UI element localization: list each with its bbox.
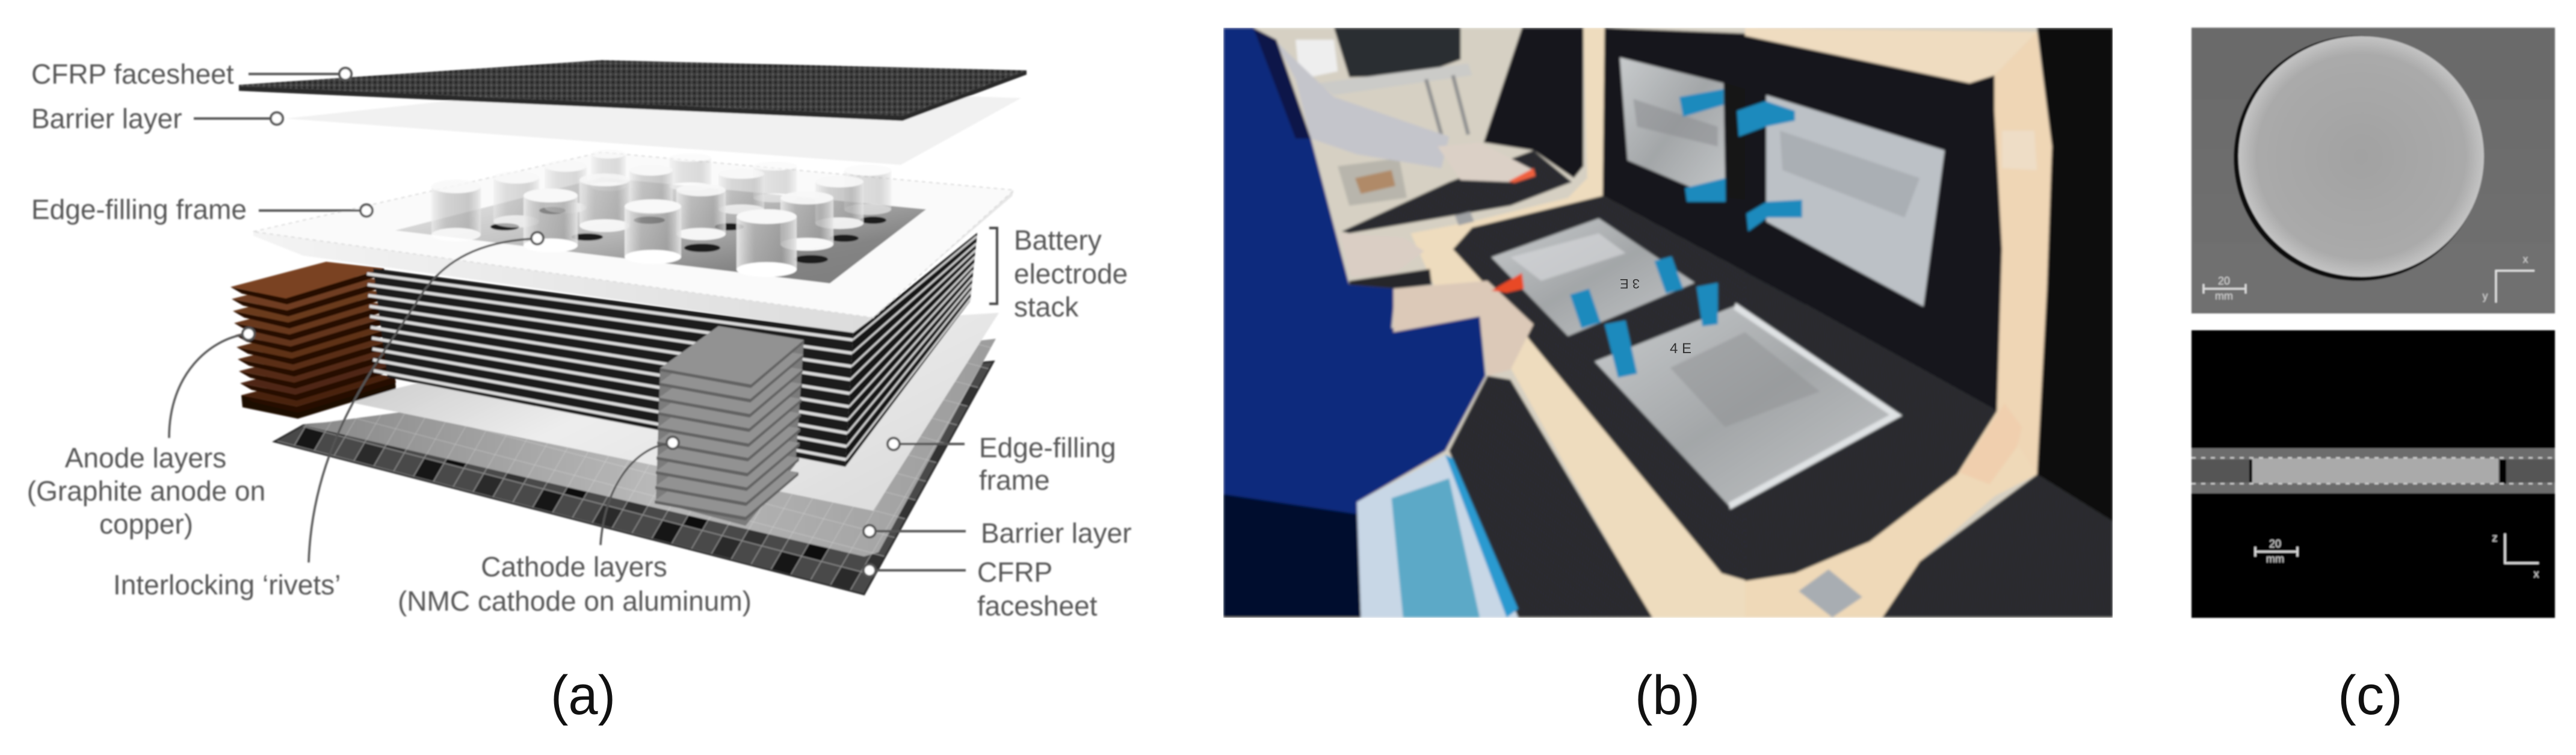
label: Anode layers: Anode layers [65,442,226,473]
panel: (a) exploded battery structure diagram [27,58,1132,621]
label: CFRP facesheet (top) [31,58,351,90]
top CFRP facesheet [239,60,1027,121]
carbon fibre pad [1451,194,1747,581]
pouch cell 1 [1491,218,1694,336]
bottom right carbon sheet [1882,475,2113,618]
panel: (c) bottom CT scan, x-z plane [2191,330,2555,618]
photo background [1223,28,2113,618]
pouch marking 4E: 4 E [1670,341,1691,357]
label: Barrier layer (bottom) [863,517,1132,549]
axes x y: x [2522,253,2528,265]
label: Edge-filling frame (bottom): Edge-filling [979,432,1116,463]
label: Anode layers: (Graphite anode on [27,475,265,507]
photo: right-side scene [1595,28,2113,618]
diagonal foam strip [1745,411,2037,618]
foam block lower [1960,403,2022,484]
gap left [2249,460,2252,482]
wall pouch cell right [1766,95,1945,306]
pillar between wall pouches [1734,119,1735,120]
black mould corner [1484,28,1583,178]
lab equipment in the background [1296,28,1472,206]
rivet holes on the frame floor [490,207,886,263]
caption: (c): (c) [2338,665,2403,726]
carbon fibre rear floor [1342,150,1572,233]
lower CFRP facesheet [274,362,993,594]
worker's glove on table [1418,248,1423,253]
label: Battery electrode stack: Battery [1014,224,1102,256]
label: Edge-filling frame (top): Edge-filling frame [31,194,247,225]
dark halo behind disc [2234,35,2483,281]
blue and white cloth [1357,455,1518,618]
colleague's white sleeve and hand [1274,40,1536,183]
label: Edge-filling frame (bottom) [888,432,1116,496]
label: CFRP facesheet (bottom): CFRP [977,556,1052,588]
dark wall [1745,32,2002,411]
lower edge-filling frame [345,313,999,511]
scale bar 20 mm: 20 [2218,275,2230,287]
axes x z [2492,532,2539,580]
label: Battery electrode stack [989,224,1128,322]
anode layers stack [230,262,396,419]
CT background [2191,28,2555,313]
top foam beam [1745,28,2037,83]
label: Battery electrode stack: stack [1014,291,1079,322]
photo: left-side scene [1223,28,1805,618]
label: CFRP facesheet (bottom) [863,556,1098,621]
foam frame [1411,28,1746,618]
label: Edge-filling frame (bottom): frame [979,464,1050,496]
axes x z: x [2533,568,2539,580]
battery electrode stack [367,233,977,467]
rear wall [1601,28,1748,274]
pouch cell 2 [1595,306,1896,506]
pouch 2 tape tabs [1605,283,1718,378]
label: CFRP facesheet (bottom): facesheet [977,590,1098,621]
foam left [2191,460,2250,482]
vertical foam strip [1962,32,2052,486]
label: Cathode layers: Cathode layers [481,551,667,582]
small metal tile [1799,569,1862,618]
interlocking rivets [431,149,891,277]
label: Cathode layers: (NMC cathode on aluminum) [398,585,752,617]
scale bar 20 mm: 20 [2269,538,2281,550]
worker's navy sweater [1223,28,1486,618]
label: Edge-filling frame (top) [31,194,372,225]
cathode layers stack [655,326,804,526]
worker's gloved hands [1394,281,1534,375]
scale bar 20 mm [2204,275,2246,302]
scale bar 20 mm: mm [2215,290,2233,302]
foam block upper [2002,131,2037,170]
wall tape tabs [1737,101,1802,232]
composite band [2191,448,2555,493]
upper edge-filling frame [253,152,1014,333]
gap right [2500,460,2506,484]
carbon fibre pad right [1745,272,1997,581]
axes x y [2483,253,2534,303]
dark table edge [1349,269,1432,289]
label: Anode layers [27,328,265,540]
wall pouch cell [1620,58,1725,202]
scale bar 20 mm [2255,538,2297,565]
label: Barrier layer (top) [31,103,283,134]
label: Interlocking rivets: Interlocking ‘rivets’ [113,569,341,600]
lower carbon fibre sheet [1449,375,1652,618]
caption: (b): (b) [1635,665,1700,726]
red tool [1491,273,1524,292]
top barrier layer [286,84,1021,165]
panel: (c) top CT scan, x-y plane [2191,28,2555,313]
rightmost black panel [2037,28,2113,522]
pouch marking 3E: 3 E [1620,276,1640,291]
panel: (b) photograph of battery cells laid in a carbon fibre structure [1223,28,2113,618]
scale bar 20 mm: mm [2266,553,2284,565]
caption: (a): (a) [551,665,616,726]
axes x y: y [2483,290,2488,302]
label: Barrier layer (bottom): Barrier layer [981,517,1132,549]
axes x z: z [2492,532,2497,544]
specimen disc [2238,36,2484,277]
battery cell section [2252,458,2498,483]
lower barrier layer [303,339,996,556]
label: Anode layers: copper) [99,508,193,540]
label: Interlocking rivets [113,232,543,600]
small tile [1455,212,1474,226]
label: Battery electrode stack: electrode [1014,258,1128,289]
label: Barrier layer (top): Barrier layer [31,103,182,134]
blue tape tabs [1570,89,1725,328]
foam right [2506,460,2555,482]
label: Cathode layers [398,437,752,617]
black background [2191,330,2555,618]
label: CFRP facesheet (top): CFRP facesheet [31,58,234,90]
